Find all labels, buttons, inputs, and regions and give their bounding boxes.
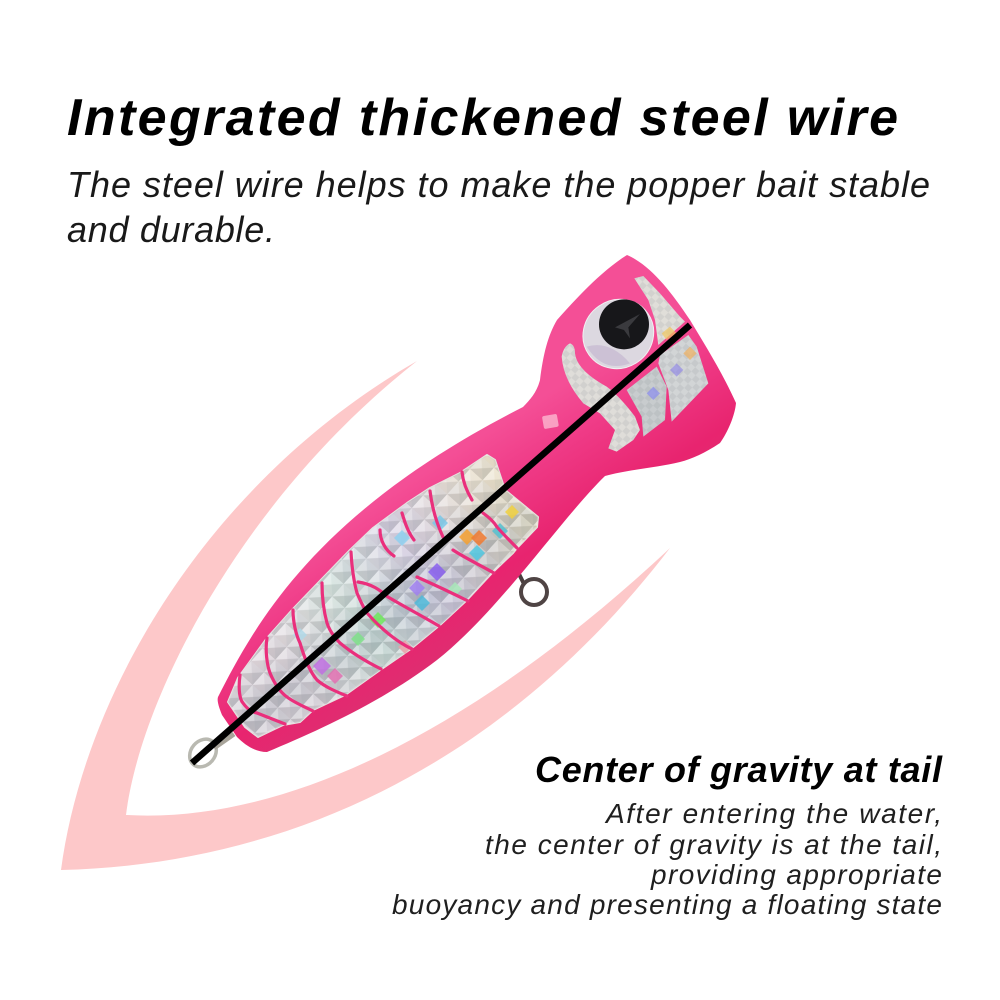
subtitle text block: The steel wire helps to make the popper bait stable bbox=[67, 164, 930, 205]
head holographic panels bbox=[562, 276, 708, 452]
title: Integrated thickened steel wire bbox=[67, 89, 898, 147]
steel wire bbox=[192, 325, 690, 763]
lure illustration bbox=[184, 255, 736, 772]
tail screw eye bbox=[184, 734, 234, 772]
body holographic scales bbox=[228, 455, 538, 737]
callout heading: Center of gravity at tail bbox=[535, 749, 943, 790]
callout body bbox=[392, 798, 942, 920]
iridescent facets bbox=[293, 505, 519, 684]
lure body bbox=[218, 255, 736, 752]
callout body: the center of gravity is at the tail, bbox=[485, 829, 942, 860]
subtitle text block: and durable. bbox=[67, 209, 275, 250]
callout body: After entering the water, bbox=[604, 798, 942, 829]
callout body: buoyancy and presenting a floating state bbox=[392, 889, 942, 920]
belly screw eye bbox=[518, 572, 547, 605]
callout body: providing appropriate bbox=[650, 859, 942, 890]
callout: center of gravity bbox=[392, 749, 943, 920]
icon: lure eye bbox=[569, 285, 667, 382]
icon: pale pink swoosh arrow bbox=[61, 361, 670, 870]
pink scale ribs bbox=[239, 472, 517, 724]
subtitle text block bbox=[67, 164, 930, 250]
body gloss highlight bbox=[542, 414, 559, 429]
